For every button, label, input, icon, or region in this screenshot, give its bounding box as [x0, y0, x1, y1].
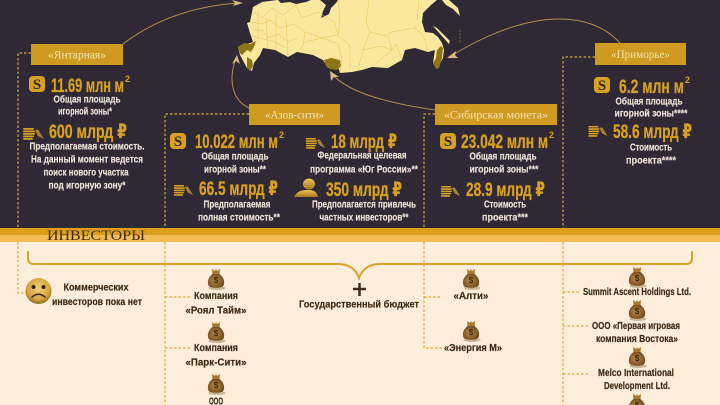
- text: Melco International: Development Ltd.: [604, 380, 670, 392]
- arrow: Азов-сити to map: [232, 55, 249, 108]
- text: Парк-Сити: [186, 342, 247, 368]
- value: area: 11.69 млн м: [51, 75, 124, 97]
- text: area caption: игорной зоны*: [58, 106, 112, 118]
- text: area caption: [470, 150, 539, 176]
- map of Russia with highlighted regions: [238, 0, 460, 73]
- text: total cost caption: [198, 200, 280, 224]
- text: cost caption: проекта***: [482, 212, 528, 224]
- icon: coins: [174, 185, 193, 196]
- text: total cost caption: Предполагаемая: [204, 200, 271, 210]
- icon: coins: [306, 138, 325, 149]
- icon: money bag: [629, 300, 646, 321]
- text: cost caption: [626, 142, 676, 166]
- icon: money bag: $: [214, 276, 219, 285]
- text: federal programme caption: Федеральная целевая: [318, 150, 407, 162]
- text: federal programme caption: программа «Юг России»**: [310, 164, 418, 176]
- panel: Сибирская монета: [435, 104, 557, 224]
- text: area caption: игорной зоны***: [470, 164, 539, 176]
- text: no commercial investors: [52, 282, 142, 308]
- arrow: Приморье to map: [447, 19, 620, 58]
- icon: money bag: $: [214, 381, 219, 390]
- column: Приморье investors: [583, 267, 691, 405]
- text: Роял Тайм: Компания: [194, 290, 238, 302]
- text: cost caption: проекта****: [626, 156, 676, 166]
- text: cost caption: Стоимость: [484, 200, 526, 210]
- text: private investment caption: [312, 200, 416, 224]
- icon: money bag: [629, 394, 646, 405]
- investors header band: [0, 228, 720, 244]
- text: area caption: игорной зоны****: [614, 108, 688, 120]
- text: Melco International: [598, 367, 674, 392]
- icon: money bag: [629, 347, 646, 368]
- text: Энергия М: «Энергия М»: [444, 342, 502, 354]
- value: area: 23.042 млн м: [461, 131, 548, 153]
- text: area caption: [614, 96, 688, 120]
- dark upper background: [0, 0, 720, 228]
- plus sign: [353, 283, 366, 296]
- value: area: 10.022 млн м: [195, 131, 278, 153]
- text: Первая игровая компания Востока: ООО «Первая игровая: [592, 320, 680, 332]
- value: area: [51, 74, 130, 97]
- label: Приморье: «Приморье»: [611, 49, 670, 61]
- panel: Приморье: [588, 43, 692, 166]
- text: area caption: [202, 150, 268, 176]
- value: area: 2: [549, 130, 554, 140]
- label: Азов-сити: [249, 104, 340, 125]
- label: Янтарная: «Янтарная»: [48, 50, 106, 62]
- text: federal programme caption: [310, 150, 418, 176]
- text: state budget: Государственный бюджет: [299, 298, 419, 310]
- text: private investment caption: частных инвесторов**: [320, 212, 409, 224]
- text: Парк-Сити: «Парк-Сити»: [186, 356, 247, 368]
- value: area: 6.2 млн м: [619, 76, 684, 98]
- text: area caption: Общая площадь: [470, 150, 536, 162]
- text: cost caption: На данный момент ведется: [31, 154, 143, 166]
- icon: area: S: [598, 78, 606, 94]
- text: no commercial investors: Коммерческих: [64, 282, 129, 294]
- text: Роял Тайм: [186, 290, 247, 316]
- text: total cost caption: полная стоимость**: [198, 212, 280, 224]
- column: Янтарная investors: [26, 278, 142, 308]
- icon: area: [29, 76, 45, 93]
- text: area caption: Общая площадь: [54, 94, 120, 106]
- icon: sad face: [26, 278, 52, 304]
- value: federal programme: 18 млрд ₽: [331, 131, 397, 153]
- icon: money bag: $: [469, 328, 474, 337]
- heading: investors: ИНВЕСТОРЫ: [47, 228, 145, 244]
- icon: area: S: [33, 77, 41, 93]
- icon: area: [170, 133, 186, 150]
- arrow: Сибирская монета to map: [330, 71, 435, 110]
- value: cost: 600 млрд ₽: [49, 121, 127, 143]
- label: Азов-сити: «Азов-сити»: [265, 110, 324, 122]
- arrow: Янтарная to map: [123, 0, 243, 44]
- icon: coins: [588, 126, 608, 137]
- dotted connectors: [18, 53, 31, 228]
- text: cost caption: под игорную зону*: [48, 180, 126, 192]
- text: Первая игровая компания Востока: [592, 320, 680, 345]
- label: Янтарная: [31, 44, 123, 65]
- brace: shared investors: [28, 251, 692, 278]
- text: cost caption: [482, 200, 528, 224]
- icon: coins: [441, 186, 460, 197]
- dotted connectors in investors section: [18, 242, 25, 293]
- text: Алти: «Алти»: [454, 290, 489, 302]
- value: area: 2: [685, 75, 690, 85]
- text: Парк-Сити: Компания: [194, 342, 238, 354]
- value: private investment: 350 млрд ₽: [326, 179, 402, 201]
- cream lower background: [0, 242, 720, 405]
- text: no commercial investors: инвесторов пока нет: [52, 296, 142, 308]
- icon: area: S: [444, 134, 452, 150]
- column: Сибирская монета investors: [444, 269, 502, 354]
- icon: money bag: $: [635, 274, 640, 283]
- text: cost caption: Стоимость: [630, 142, 672, 154]
- value: area: [195, 130, 284, 153]
- text: cost caption: Предполагаемая стоимость.: [30, 142, 145, 152]
- text: private investment caption: Предполагается привлечь: [312, 200, 416, 210]
- text: cost caption: поиск нового участка: [44, 168, 129, 178]
- text: Роял Тайм: «Роял Тайм»: [186, 304, 247, 316]
- text: area caption: Общая площадь: [202, 150, 268, 162]
- text: cost caption: [30, 142, 145, 192]
- icon: money bag: [629, 267, 646, 288]
- icon: money bag: $: [469, 276, 474, 285]
- text: area caption: [54, 94, 120, 118]
- text: area caption: Общая площадь: [616, 96, 682, 108]
- value: cost: 28.9 млрд ₽: [466, 179, 545, 201]
- icon: money bag: $: [635, 354, 640, 363]
- icon: money bag: $: [635, 307, 640, 316]
- icon: money bag: $: [214, 329, 219, 338]
- label: Сибирская монета: «Сибирская монета»: [444, 110, 548, 122]
- value: total cost: 66.5 млрд ₽: [199, 178, 278, 200]
- panel: Янтарная: [23, 44, 145, 192]
- value: area: 2: [279, 130, 284, 140]
- icon: coins: [23, 128, 44, 140]
- panel: Азов-сити: [170, 104, 418, 224]
- icon: investor: [294, 178, 318, 197]
- value: area: 2: [125, 74, 130, 84]
- text: area caption: игорной зоны**: [204, 164, 266, 176]
- text: Первая игровая компания Востока: компания Востока»: [596, 333, 678, 345]
- column: Азов-сити investors: [186, 269, 247, 405]
- text: Melco International: Melco International: [598, 367, 674, 379]
- icon: area: S: [174, 134, 182, 150]
